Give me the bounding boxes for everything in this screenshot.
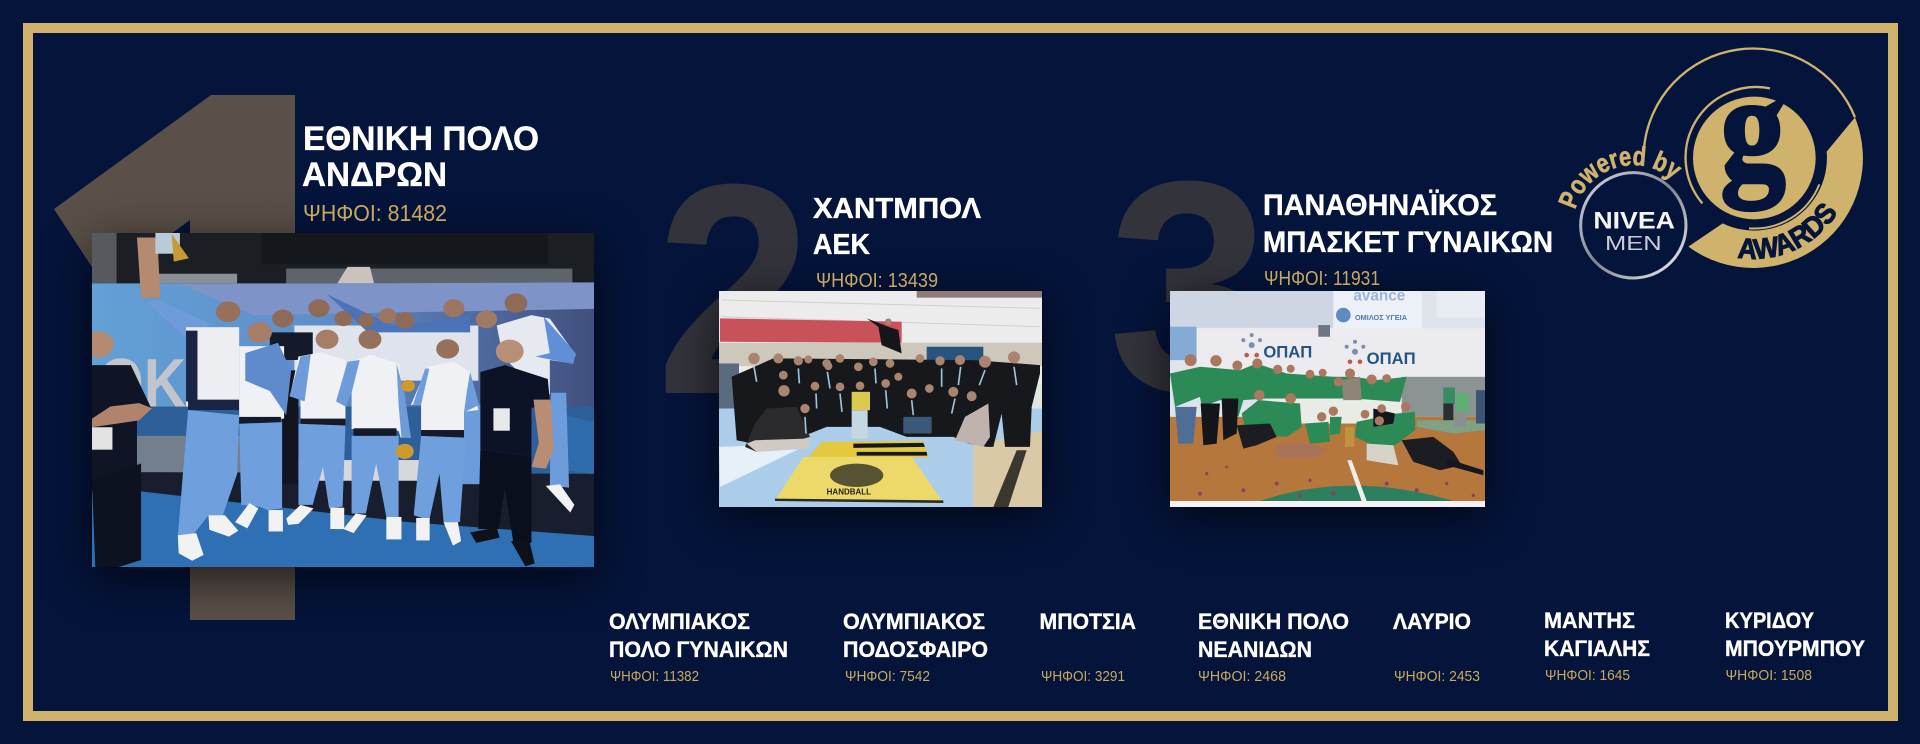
Powered by curved text: Powered by	[1558, 146, 1682, 209]
photo: water polo team: OK	[98, 345, 186, 422]
winner 1 title: ΨΗΦΟΙ: 81482	[303, 200, 447, 226]
team players	[1170, 354, 1483, 475]
photo: water polo team	[92, 233, 594, 567]
banners on floor: HANDBALL	[827, 487, 871, 496]
player centre left	[286, 330, 345, 529]
runners-up list	[609, 608, 1865, 685]
Nivea Men badge	[1581, 173, 1686, 278]
photo: Panathinaikos basketball team: ΟΜΙΛΟΣ ΥΓΕΙΑ	[1355, 313, 1408, 322]
runner-up: Mantis Kagialis	[1544, 608, 1650, 684]
runner-up: Botsia	[1040, 609, 1136, 685]
background players	[1443, 387, 1485, 427]
player centre	[336, 330, 415, 539]
banners on floor	[775, 441, 943, 503]
photo: Panathinaikos basketball team: avance	[1353, 288, 1405, 305]
runner-up: Olympiakos water polo: ΨΗΦΟΙ: 11382	[610, 669, 699, 685]
man in navy polo	[470, 340, 554, 566]
rank number 3: 3	[1108, 118, 1270, 454]
winner 3 title: ΨΗΦΟΙ: 11931	[1264, 268, 1380, 290]
runner-up: Mantis Kagialis: ΚΑΓΙΑΛΗΣ	[1544, 636, 1650, 661]
winner 1 title	[302, 120, 539, 226]
runner-up: Olympiakos water polo: ΠΟΛΟ ΓΥΝΑΙΚΩΝ	[609, 637, 788, 662]
outer thin arc	[1644, 49, 1855, 148]
inner arc left	[1686, 87, 1770, 203]
gold disc with g: g	[1720, 44, 1786, 210]
winner 2 title: ΨΗΦΟΙ: 13439	[816, 270, 938, 292]
runner-up: Olympiakos football	[843, 609, 988, 685]
runner-up: national junior water polo: ΕΘΝΙΚΗ ΠΟΛΟ	[1198, 609, 1349, 634]
logo: g awards powered by Nivea Men	[1558, 44, 1863, 280]
player right	[411, 339, 479, 546]
rank number 2: 2	[656, 121, 812, 457]
runner-up: Mantis Kagialis: ΨΗΦΟΙ: 1645	[1545, 668, 1630, 684]
runner-up: Lavrio: ΨΗΦΟΙ: 2453	[1394, 669, 1480, 685]
back row	[270, 294, 497, 484]
runner-up: Olympiakos water polo: ΟΛΥΜΠΙΑΚΟΣ	[609, 609, 750, 634]
runner-up: Lavrio: ΛΑΥΡΙΟ	[1393, 609, 1471, 634]
winner 3 title: ΜΠΑΣΚΕΤ ΓΥΝΑΙΚΩΝ	[1263, 226, 1553, 259]
runner-up: national junior water polo: ΨΗΦΟΙ: 2468	[1198, 669, 1286, 685]
floor	[719, 409, 1042, 507]
Nivea Men badge: NIVEA	[1593, 207, 1675, 234]
left man in dark shirt	[83, 331, 152, 567]
runner-up: Olympiakos football: ΟΛΥΜΠΙΑΚΟΣ	[843, 609, 985, 634]
runner-up: national junior water polo	[1198, 609, 1349, 685]
winner 3 title: ΠΑΝΑΘΗΝΑΪΚΟΣ	[1263, 189, 1497, 222]
photo shadows	[92, 245, 1485, 579]
runner-up: Kyridou Bourbou: ΨΗΦΟΙ: 1508	[1726, 668, 1812, 684]
gold disc with g	[1693, 44, 1816, 219]
runner-up: national junior water polo: ΝΕΑΝΙΔΩΝ	[1198, 637, 1312, 662]
runner-up: Botsia: ΨΗΦΟΙ: 3291	[1041, 669, 1125, 685]
winner 2 title	[813, 193, 982, 292]
runner-up: Olympiakos water polo	[609, 609, 788, 685]
runner-up: Mantis Kagialis: ΜΑΝΤΗΣ	[1544, 608, 1635, 633]
photo: Panathinaikos basketball team: ΟΠΑΠ	[1367, 349, 1416, 368]
winner 2 title: ΧΑΝΤΜΠΟΛ	[813, 193, 982, 225]
photo: handball AEK team	[719, 291, 1042, 507]
runner-up: Botsia: ΜΠΟΤΣΙΑ	[1040, 609, 1136, 634]
winner 1 title: ΕΘΝΙΚΗ ΠΟΛΟ	[303, 120, 539, 158]
photo: Panathinaikos basketball team: ΟΠΑΠ	[1263, 342, 1312, 361]
rank number 1	[54, 95, 295, 620]
player with flag	[235, 322, 291, 531]
runner-up: Lavrio	[1393, 609, 1480, 685]
runner-up: Kyridou Bourbou: ΚΥΡΙΔΟΥ	[1725, 608, 1814, 633]
crowd	[732, 318, 1040, 452]
gold crescent	[1688, 117, 1863, 268]
inner arc lower right	[1749, 184, 1819, 229]
photo: Panathinaikos basketball team	[1170, 288, 1485, 507]
floor	[1170, 417, 1485, 507]
right rear player	[497, 293, 576, 512]
winner 3 title	[1263, 189, 1553, 290]
runner-up: Olympiakos football: ΠΟΔΟΣΦΑΙΡΟ	[843, 637, 988, 662]
runner-up: Kyridou Bourbou	[1725, 608, 1865, 684]
winner 2 title: ΑΕΚ	[813, 229, 870, 261]
runner-up: Olympiakos football: ΨΗΦΟΙ: 7542	[845, 669, 930, 685]
player raising hand	[137, 233, 240, 561]
AWARDS curved text: AWARDS	[1737, 203, 1836, 260]
winner 1 title: ΑΝΔΡΩΝ	[302, 156, 447, 194]
runner-up: Kyridou Bourbou: ΜΠΟΥΡΜΠΟΥ	[1725, 636, 1865, 661]
Nivea Men badge: MEN	[1605, 232, 1662, 255]
